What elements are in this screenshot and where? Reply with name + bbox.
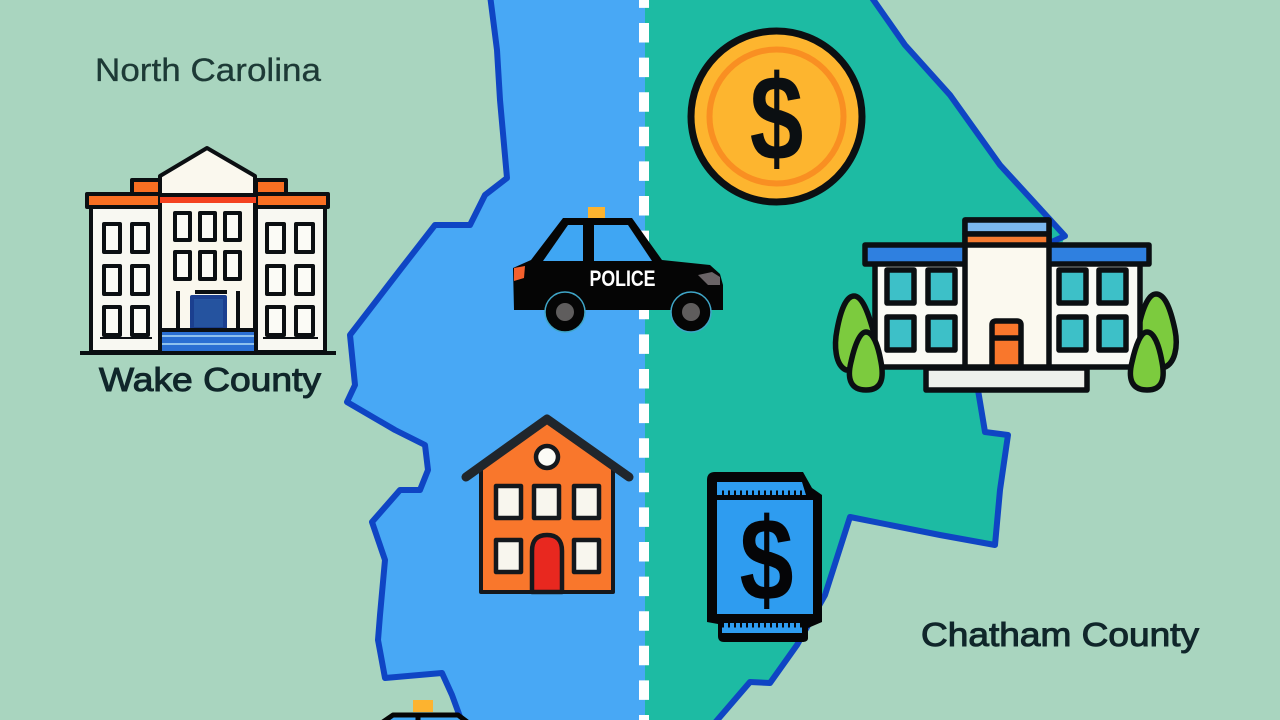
label: North Carolina: North Carolina [95, 52, 321, 88]
icon: Wake County courthouse [80, 148, 336, 353]
icon: police car [513, 207, 723, 332]
region: Wake County side (blue) [347, 0, 645, 720]
icon: Wake County house [466, 419, 629, 592]
icon: dollar banknote packet: $ [740, 494, 794, 626]
county boundary dashed line [639, 0, 649, 720]
region: Chatham County side (teal) [645, 0, 1065, 720]
icon: dollar banknote packet [707, 472, 822, 642]
label: Wake County: Wake County [99, 361, 322, 398]
region border: Wake County [347, 0, 507, 720]
region border: Chatham County [713, 0, 1065, 720]
icon: gold coin [691, 31, 862, 202]
icon: second police car, cropped at bottom edge [380, 700, 470, 720]
label: Chatham County: Chatham County [921, 616, 1200, 653]
icon: police car: POLICE [590, 266, 656, 291]
icon: Chatham County office building [836, 220, 1176, 390]
icon: gold coin: $ [750, 50, 803, 187]
